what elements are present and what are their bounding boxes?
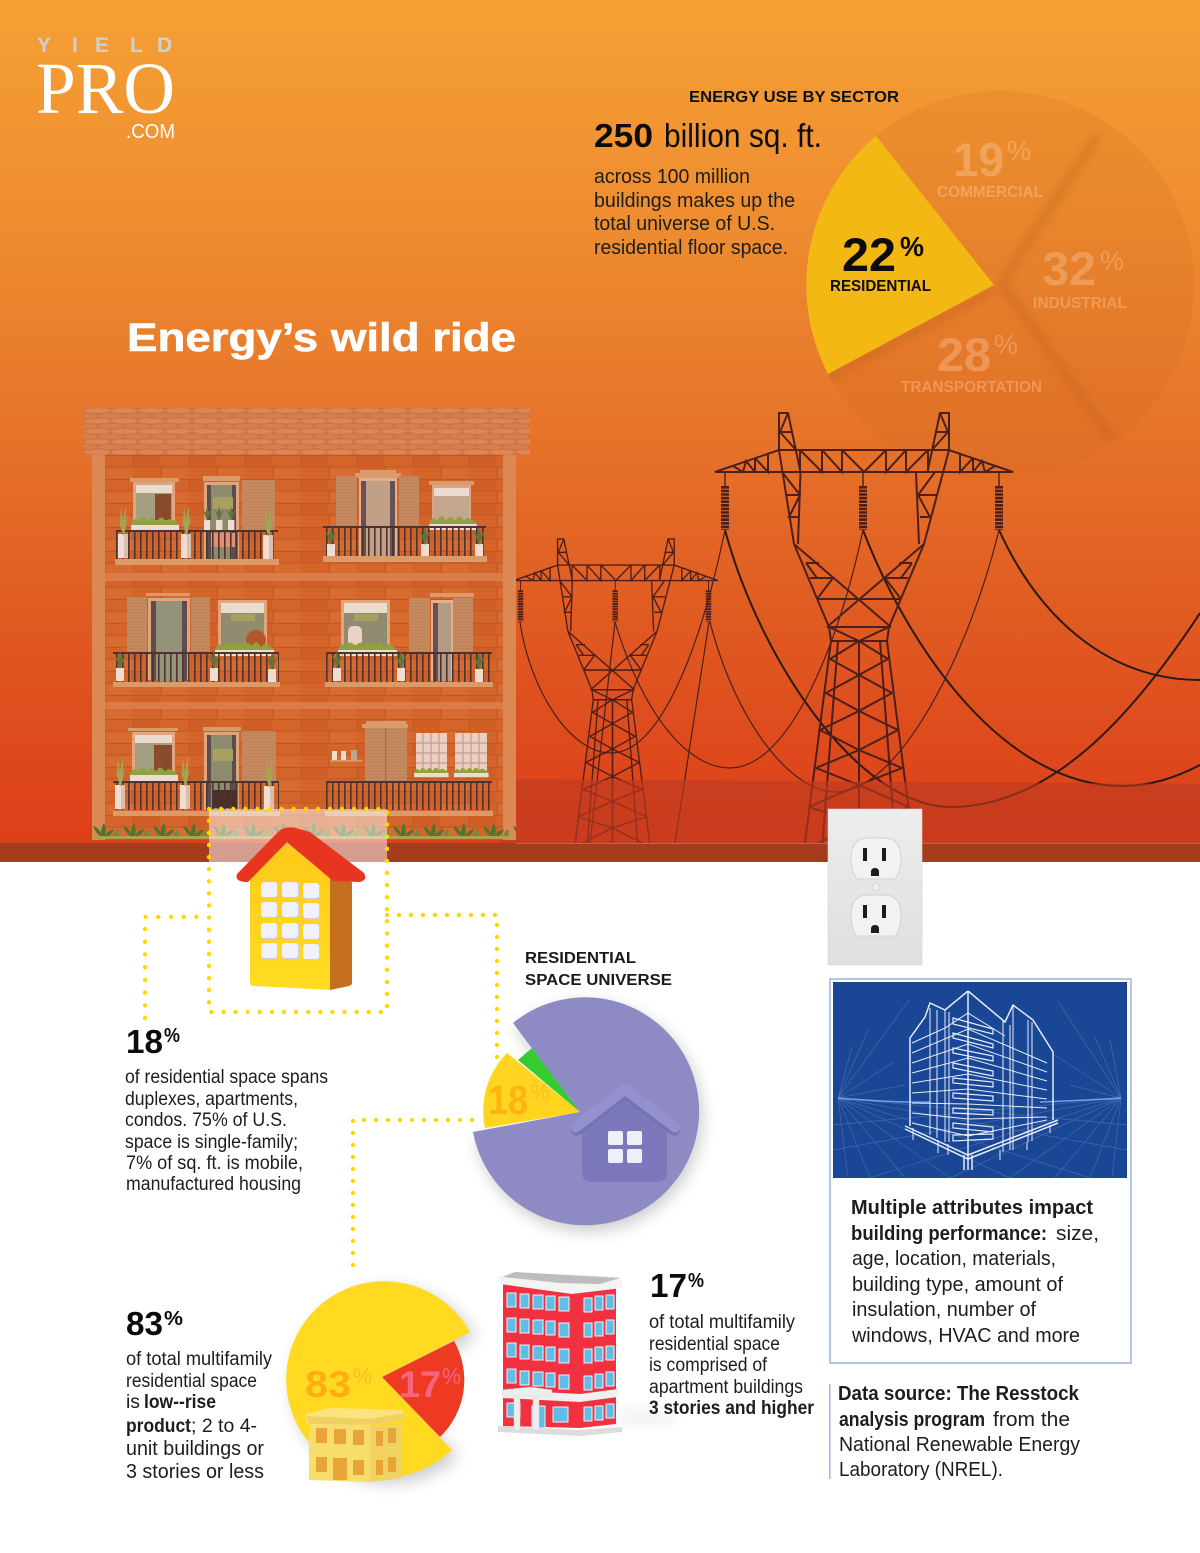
card text: insulation, number of xyxy=(852,1299,1036,1321)
tower: large pylon xyxy=(715,413,1013,850)
wireframe building xyxy=(905,991,1058,1170)
stat: 17% high-rise xyxy=(649,1267,815,1419)
text: floor space description: across 100 million xyxy=(594,166,750,188)
card text: Multiple attributes impact xyxy=(851,1197,1093,1219)
stat: 17% high-rise: of total multifamily xyxy=(649,1312,795,1333)
text: floor space description: residential floor space. xyxy=(594,237,788,259)
heading: residential space universe: SPACE UNIVERSE xyxy=(525,972,672,989)
stat: 83% low-rise: low--rise xyxy=(144,1392,216,1413)
red slice 17% xyxy=(382,1341,464,1437)
text: floor space description xyxy=(594,166,795,259)
pie: non-residential sectors xyxy=(828,91,1147,444)
horizon glow xyxy=(838,1098,1121,1102)
stat: 250 billion sq. ft.: billion sq. ft. xyxy=(664,117,822,154)
card text: building type, amount of xyxy=(852,1274,1063,1296)
label: residential 22% xyxy=(830,228,931,295)
label: commercial 19% xyxy=(937,133,1043,201)
icon: wall outlet xyxy=(828,809,922,965)
top floor right balcony xyxy=(323,470,487,562)
label 17%: % xyxy=(442,1363,461,1389)
yellow slice 18% xyxy=(483,1053,580,1128)
label 18%: % xyxy=(530,1079,550,1106)
heading: residential space universe xyxy=(525,950,672,989)
perspective rays xyxy=(833,1000,1127,1178)
label 17% xyxy=(399,1363,461,1405)
translucent highlight over building base xyxy=(209,809,387,862)
ground floor left balcony xyxy=(113,727,280,816)
stat: 17% high-rise: % xyxy=(688,1270,704,1292)
label: industrial 32%: % xyxy=(1100,245,1124,276)
logo: YieldPro.com: PRO xyxy=(36,48,175,129)
horizon ground band xyxy=(500,779,1200,843)
panel: energy use by sector pie chart xyxy=(806,91,1147,444)
pie shadow xyxy=(476,1003,702,1231)
title: Energy’s wild ride xyxy=(127,316,516,360)
stat: 83% low-rise: % xyxy=(164,1308,183,1330)
white floor band xyxy=(502,1389,618,1402)
green slice xyxy=(518,1048,580,1112)
stat: 18% residential xyxy=(125,1023,328,1195)
windows xyxy=(507,1293,614,1428)
card text: windows, HVAC and more xyxy=(851,1325,1080,1347)
stat: 17% high-rise: 17 xyxy=(650,1267,687,1304)
text: data source note: National Renewable Energy xyxy=(839,1434,1080,1456)
floor bands xyxy=(105,573,503,709)
heading: residential space universe: RESIDENTIAL xyxy=(525,950,636,967)
stat: 83% low-rise: product xyxy=(126,1416,192,1437)
label 83%: % xyxy=(353,1363,372,1389)
logo: YieldPro.com: .COM xyxy=(126,121,175,143)
stat: 18% residential: condos. 75% of U.S. xyxy=(125,1110,287,1131)
label: commercial 19%: 19 xyxy=(953,133,1004,186)
stat: 83% low-rise: ; 2 to 4- xyxy=(191,1416,257,1437)
label: transportation 28%: TRANSPORTATION xyxy=(901,379,1042,396)
middle floor right balcony xyxy=(325,593,493,687)
pie shadow xyxy=(292,1287,476,1483)
ground floor right balcony xyxy=(325,721,493,816)
brick wall xyxy=(105,455,503,840)
front wall xyxy=(250,843,330,990)
tiled roof xyxy=(84,408,530,455)
card text: building performance: xyxy=(851,1223,1047,1245)
stat: 250 billion sq. ft. xyxy=(594,117,822,154)
tower: small pylon xyxy=(514,539,718,847)
stat: 83% low-rise: unit buildings or xyxy=(126,1438,264,1460)
pie: residential wedge xyxy=(806,136,994,374)
orange gradient header background xyxy=(0,0,1200,862)
label: residential 22%: % xyxy=(900,231,924,262)
stat: 83% low-rise: 83 xyxy=(126,1305,163,1342)
middle floor left balcony xyxy=(113,593,280,687)
label: transportation 28%: % xyxy=(994,329,1018,360)
text: data source note: Laboratory (NREL). xyxy=(839,1459,1003,1481)
stat: 18% residential: 18 xyxy=(126,1023,163,1060)
text: floor space description: total universe of U.S. xyxy=(594,213,775,235)
icon: purple house xyxy=(576,1089,675,1182)
panel: building performance card xyxy=(830,979,1131,1363)
text: data source note: analysis program xyxy=(839,1409,985,1431)
stat: 83% low-rise: 3 stories or less xyxy=(126,1461,264,1483)
stat: 83% low-rise: of total multifamily xyxy=(126,1349,272,1370)
stat: 18% residential: of residential space spans xyxy=(125,1067,328,1088)
shrubs along base xyxy=(92,823,516,839)
ground strip xyxy=(0,843,1200,862)
blueprint image xyxy=(833,982,1127,1178)
label: transportation 28%: 28 xyxy=(937,328,991,381)
label 83%: 83 xyxy=(305,1364,351,1405)
chart: multifamily split pie xyxy=(286,1281,476,1483)
stat: 83% low-rise xyxy=(126,1305,272,1483)
card text xyxy=(851,1197,1099,1347)
text: floor space description: buildings makes up the xyxy=(594,190,795,212)
icon: red high-rise building xyxy=(498,1272,675,1436)
chart: residential space universe pie xyxy=(473,997,702,1231)
label: residential 22%: RESIDENTIAL xyxy=(830,278,931,295)
roof xyxy=(498,1272,622,1294)
portico xyxy=(502,1387,552,1430)
text: data source note: from the xyxy=(993,1409,1070,1431)
label: industrial 32% xyxy=(1033,242,1127,312)
stat: 17% high-rise: apartment buildings xyxy=(649,1377,803,1398)
stat: 18% residential: % xyxy=(164,1025,180,1047)
card text: age, location, materials, xyxy=(852,1248,1056,1270)
label: industrial 32%: INDUSTRIAL xyxy=(1033,295,1127,312)
wires: thin left spans xyxy=(520,530,999,843)
red roof xyxy=(236,827,365,882)
label 18%: 18 xyxy=(488,1077,528,1123)
stat: 250 billion sq. ft.: 250 xyxy=(594,117,653,154)
stat: 83% low-rise: is xyxy=(126,1392,140,1413)
label: commercial 19%: % xyxy=(1007,135,1031,166)
label: industrial 32%: 32 xyxy=(1042,242,1096,295)
icon: yellow apartment house xyxy=(236,827,365,990)
stat: 83% low-rise: residential space xyxy=(126,1371,257,1392)
purple slice xyxy=(473,997,699,1225)
text: data source note: Data source: The Resstock xyxy=(838,1383,1080,1405)
corner pillars xyxy=(92,452,516,840)
dotted connectors xyxy=(145,809,497,1274)
card text: size, xyxy=(1056,1223,1099,1245)
stat: 17% high-rise: 3 stories and higher xyxy=(649,1398,815,1419)
power lines xyxy=(514,413,1200,850)
logo: YieldPro.com: YIELD xyxy=(37,34,172,57)
label: residential 22%: 22 xyxy=(842,228,896,281)
icon: low-rise yellow building xyxy=(306,1408,403,1482)
stat: 18% residential: duplexes, apartments, xyxy=(125,1089,298,1110)
wires: heavy right spans xyxy=(725,530,1200,807)
red walls xyxy=(503,1283,616,1428)
stat: 17% high-rise: is comprised of xyxy=(649,1355,768,1376)
side wall xyxy=(330,878,352,990)
stat: 18% residential: 7% of sq. ft. is mobile, xyxy=(126,1153,303,1174)
text: data source note xyxy=(829,1383,1080,1481)
base plinth xyxy=(498,1426,622,1436)
label: transportation 28% xyxy=(901,328,1042,396)
yellow slice 83% xyxy=(286,1281,470,1477)
stat: 18% residential: space is single-family; xyxy=(125,1132,298,1153)
top floor left balcony xyxy=(115,476,279,565)
apartment building illustration xyxy=(84,408,530,840)
heading: energy use by sector: ENERGY USE BY SECTOR xyxy=(689,89,899,106)
windows xyxy=(261,882,320,960)
label 17%: 17 xyxy=(399,1364,441,1405)
stat: 17% high-rise: residential space xyxy=(649,1334,780,1355)
label 83% xyxy=(305,1363,372,1405)
soft shadow xyxy=(615,1408,675,1426)
stat: 18% residential: manufactured housing xyxy=(126,1174,301,1195)
label: commercial 19%: COMMERCIAL xyxy=(937,184,1043,201)
